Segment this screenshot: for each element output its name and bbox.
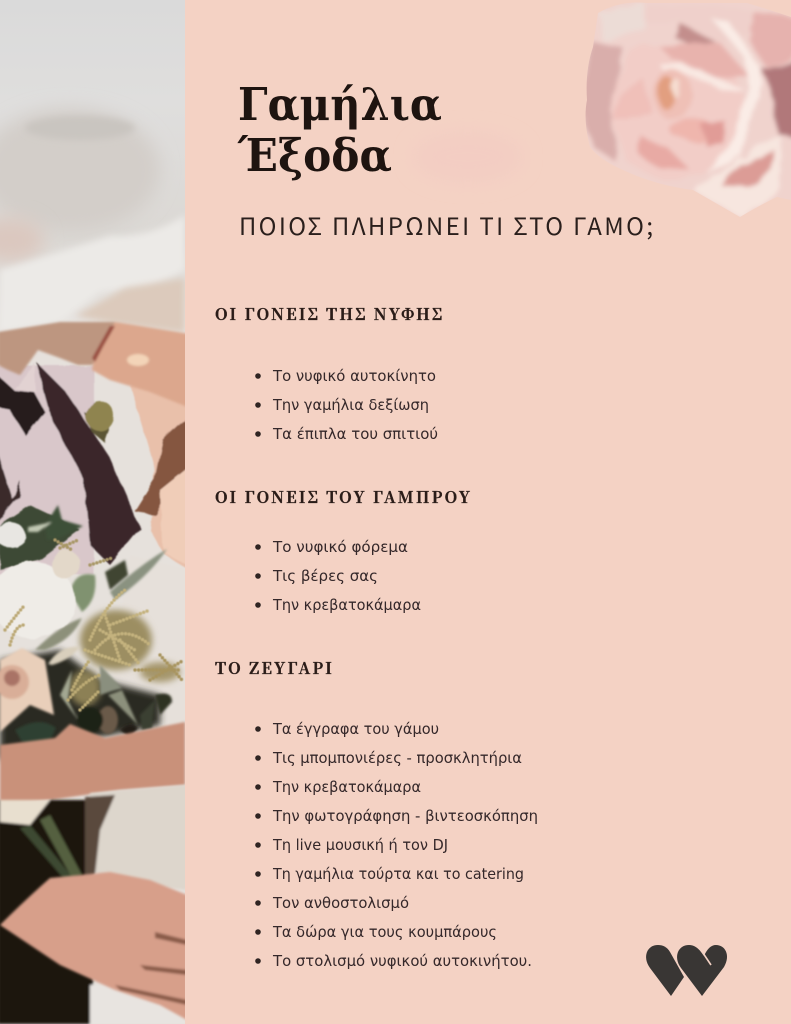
decorative watercolor rose bbox=[586, 2, 791, 217]
list: the couple: Την κρεβατοκάμαρα bbox=[272, 778, 421, 796]
section: groom's parents bbox=[215, 485, 471, 614]
photo: bride arm bbox=[0, 722, 185, 807]
subtitle: ΠΟΙΟΣ ΠΛΗΡΩΝΕΙ ΤΙ ΣΤΟ ΓΑΜΟ; bbox=[239, 207, 653, 242]
photo: bride neck and hair bbox=[130, 386, 185, 568]
photo: bride dress bbox=[105, 555, 190, 730]
bouquet: white dahlia and small flowers bbox=[0, 523, 81, 638]
list: the couple: Τα δώρα για τους κουμπάρους bbox=[272, 923, 497, 941]
photo: suit sleeve, lace and stems bbox=[0, 785, 187, 1024]
bouquet: seed clusters bbox=[5, 540, 184, 710]
faint smudge bbox=[413, 131, 523, 183]
list: the couple: Τη γαμήλια τούρτα και το catering bbox=[272, 865, 524, 883]
title: Έξοδα bbox=[237, 129, 392, 182]
heading: the couple: ΤΟ ΖΕΥΓΑΡΙ bbox=[215, 656, 332, 679]
photo: groom hand bbox=[0, 872, 187, 1020]
list: groom's parents: Τις βέρες σας bbox=[272, 567, 378, 585]
list: the couple: Την φωτογράφηση - βιντεοσκόπηση bbox=[272, 807, 538, 825]
section: the couple bbox=[215, 656, 538, 970]
heading: groom's parents: ΟΙ ΓΟΝΕΙΣ ΤΟΥ ΓΑΜΠΡΟΥ bbox=[215, 485, 471, 508]
title: Γαμήλια bbox=[238, 78, 442, 131]
list: the couple: Το στολισμό νυφικού αυτοκινήτου. bbox=[272, 952, 532, 970]
photo: groom shirt and suit bbox=[0, 362, 140, 575]
list: bride's parents: Τα έπιπλα του σπιτιού bbox=[272, 425, 438, 443]
photo: kissing faces bbox=[0, 322, 190, 408]
title bbox=[237, 78, 442, 182]
photo: veil over sky bbox=[0, 0, 185, 340]
icon: double heart logo bbox=[646, 945, 727, 996]
list: the couple bbox=[255, 720, 538, 970]
rose body bbox=[586, 2, 791, 217]
list: the couple: Τις μπομπονιέρες - προσκλητήρια bbox=[272, 749, 522, 767]
list: groom's parents: Το νυφικό φόρεμα bbox=[272, 538, 408, 556]
bouquet: blush rose bbox=[0, 648, 54, 732]
list: groom's parents bbox=[255, 538, 421, 614]
list: groom's parents: Την κρεβατοκάμαρα bbox=[272, 596, 421, 614]
photo: bouquet bbox=[0, 505, 184, 760]
section: bride's parents bbox=[215, 302, 442, 443]
bouquet: dark foliage base bbox=[0, 650, 160, 760]
heading: bride's parents: ΟΙ ΓΟΝΕΙΣ ΤΗΣ ΝΥΦΗΣ bbox=[215, 302, 442, 325]
list: the couple: Τα έγγραφα του γάμου bbox=[272, 720, 439, 738]
bouquet: leaves bbox=[15, 505, 172, 752]
list: the couple: Τη live μουσική ή τον DJ bbox=[272, 836, 448, 854]
wedding photo panel bbox=[0, 0, 195, 1024]
list: bride's parents bbox=[255, 367, 438, 443]
list: bride's parents: Την γαμήλια δεξίωση bbox=[272, 396, 429, 414]
list: the couple: Τον ανθοστολισμό bbox=[272, 894, 409, 912]
list: bride's parents: Το νυφικό αυτοκίνητο bbox=[272, 367, 436, 385]
